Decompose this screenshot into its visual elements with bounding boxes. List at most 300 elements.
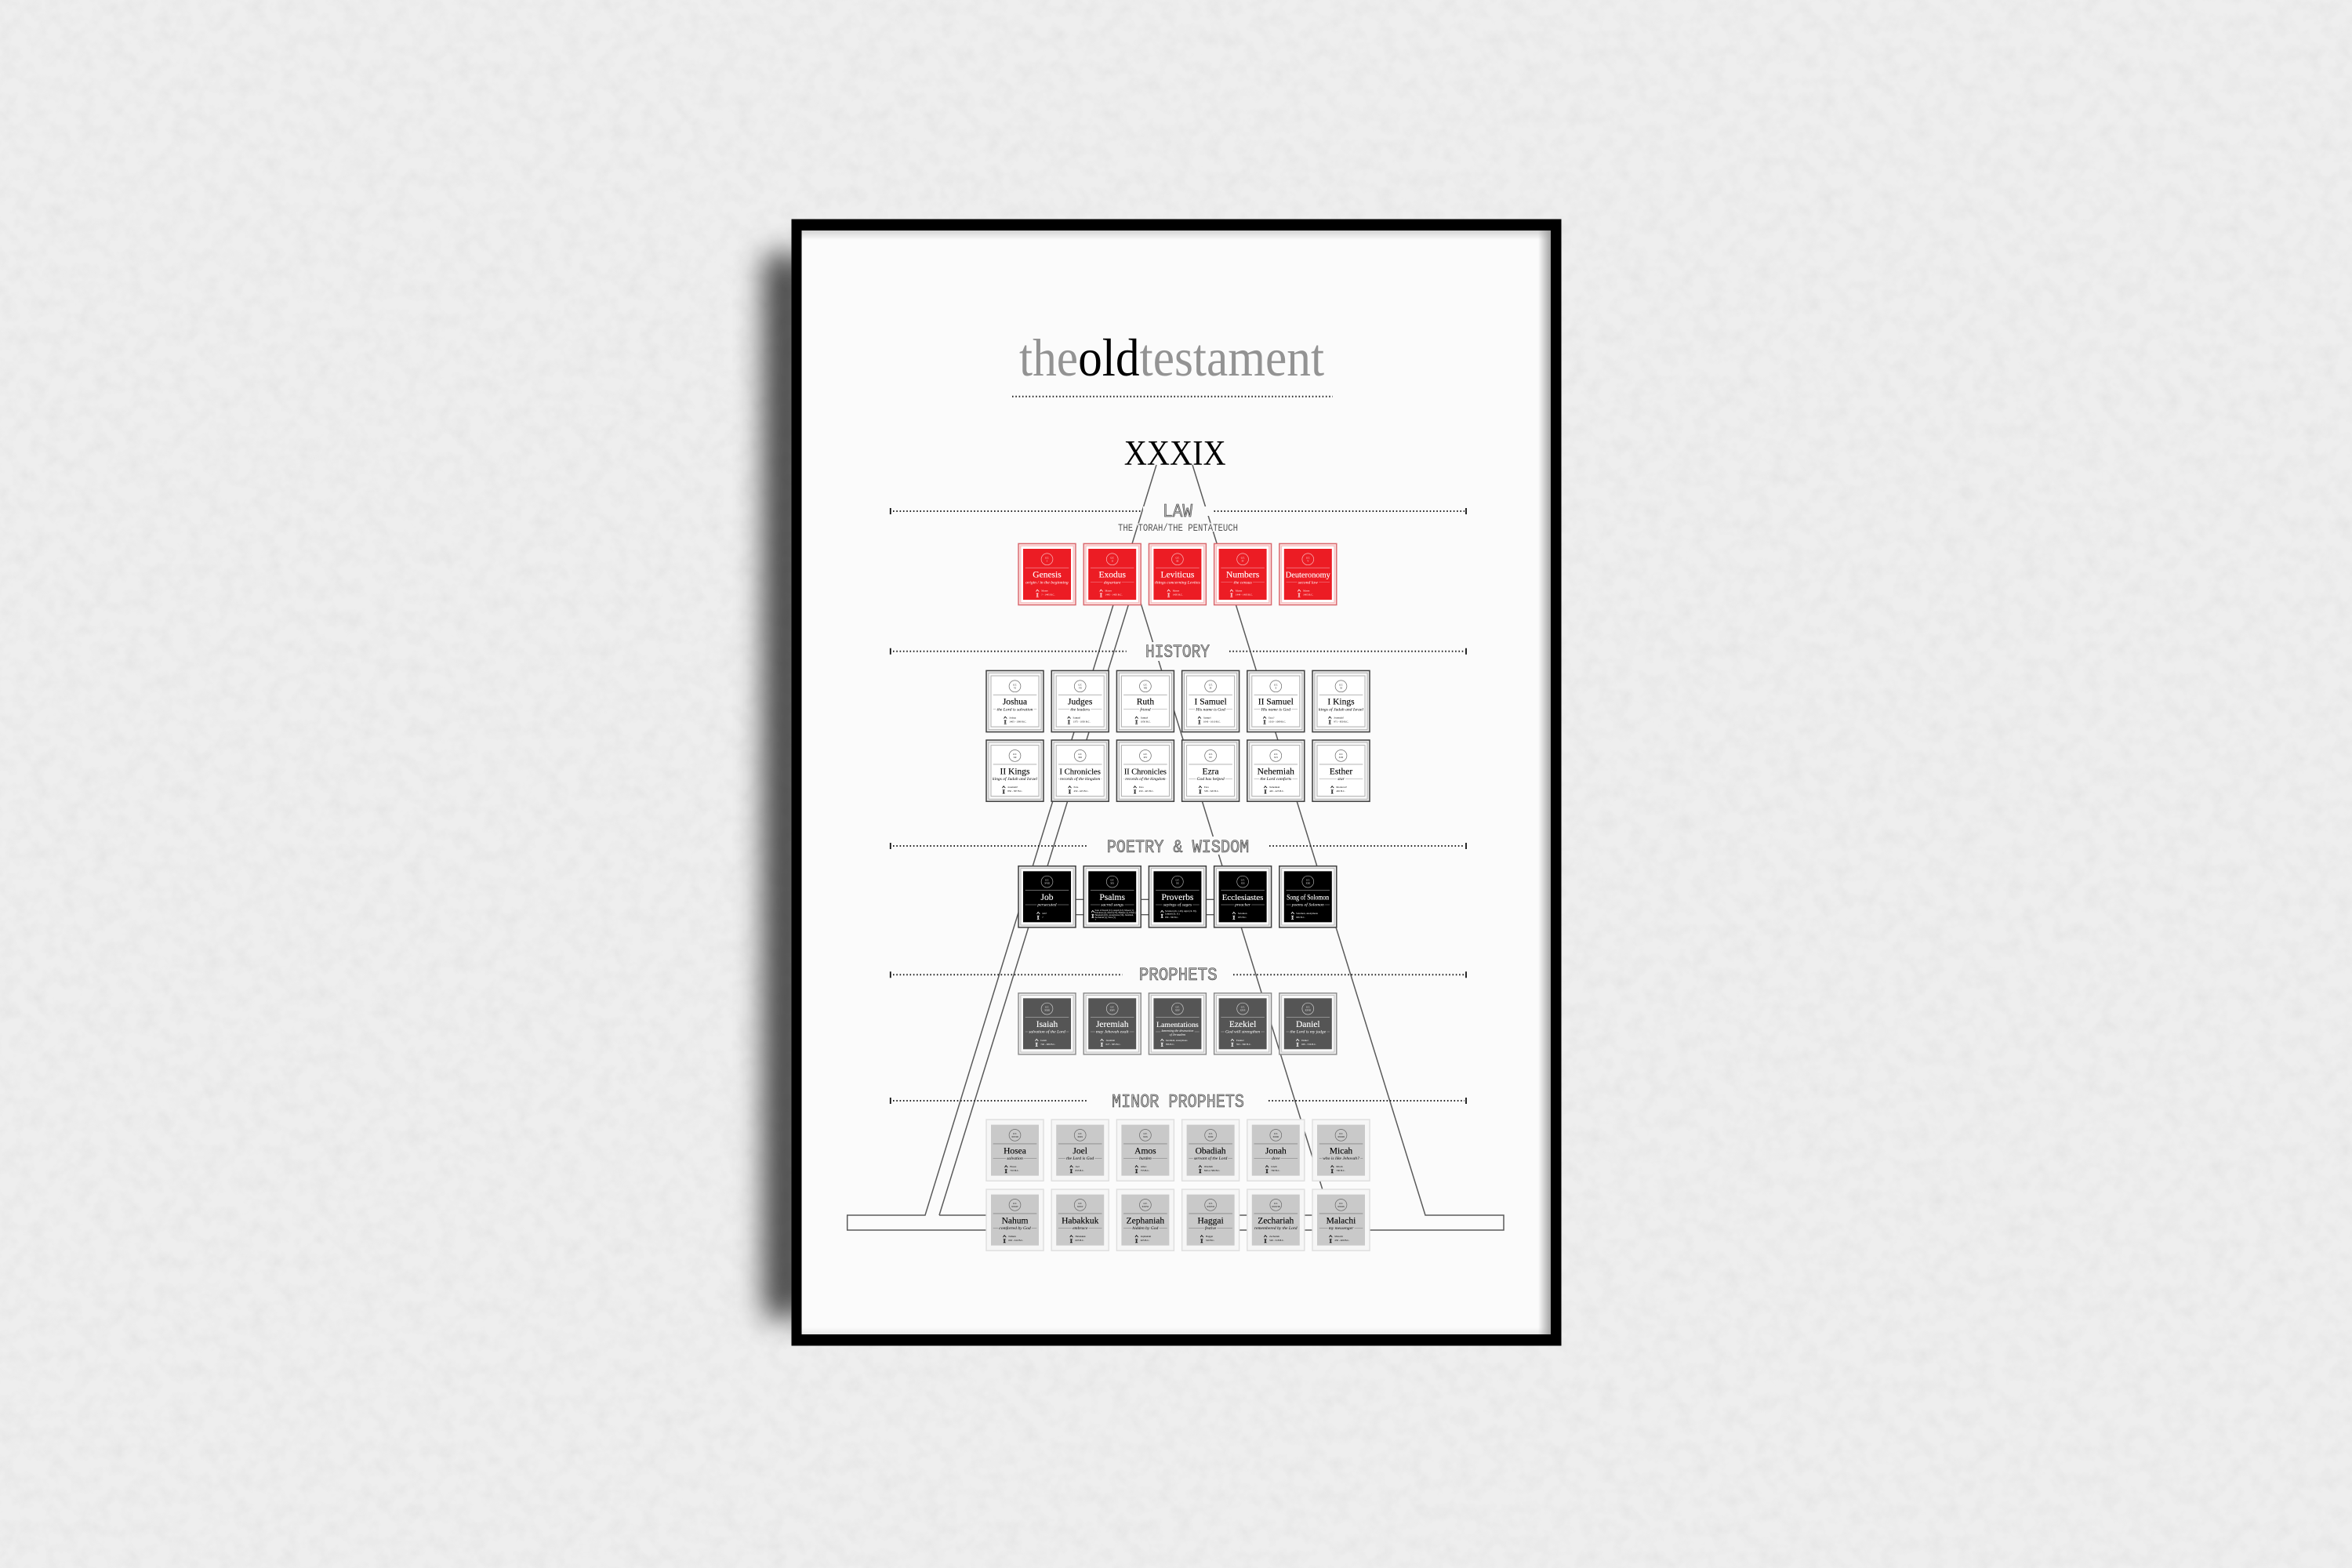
card: Judges: O.T.: [1078, 684, 1082, 686]
cards: poetry: [1018, 866, 1337, 927]
card: Haggai: 520 B.C.: [1206, 1239, 1215, 1242]
card: Ruth: O.T.: [1144, 684, 1148, 686]
card: Zephaniah: [1116, 1189, 1174, 1250]
card: Zephaniah: O.T.: [1144, 1203, 1148, 1205]
card: I Chronicles: 450 - 425 B.C.: [1074, 789, 1089, 793]
card: Lamentations: lamenting the destruction: [1161, 1029, 1193, 1033]
cards: law: [1018, 543, 1337, 605]
card: II Kings: kings of Judah and Israel: [993, 776, 1037, 782]
card: Psalms: Sons of Korah (11), Asaph (12), Moses (1),: [1094, 909, 1134, 912]
card: Micah: 700 B.C.: [1336, 1169, 1345, 1172]
card: II Samuel: His name is God: [1261, 707, 1290, 712]
card: Psalms: Hezekiah (10), anonymous (50), Jeremiah,: [1094, 913, 1134, 916]
card: Deuteronomy: V: [1307, 560, 1308, 562]
card: Numbers: the census: [1234, 580, 1252, 585]
card: Haggai: [1182, 1189, 1240, 1250]
card: Jeremiah: may Jehovah exalt: [1096, 1030, 1129, 1035]
heading: prophets: PROPHETS: [1139, 965, 1218, 985]
card: Deuteronomy: Deuteronomy: [1286, 572, 1331, 580]
card: Ruth: Samuel: [1141, 717, 1148, 720]
panel: law: [891, 502, 1466, 605]
card: Ecclesiastes: O.T.: [1241, 880, 1245, 882]
card: Zephaniah: Zephaniah: [1141, 1235, 1152, 1238]
card: I Chronicles: XIII: [1078, 757, 1082, 759]
card: Daniel: [1279, 993, 1337, 1054]
heading: minor prophets: MINOR PROPHETS: [1112, 1092, 1244, 1113]
card: Esther: [1312, 740, 1370, 801]
section rule: poetry: [893, 845, 1465, 847]
card: Exodus: II: [1112, 560, 1113, 562]
card: Exodus: 1445 - 1405 B.C.: [1105, 593, 1123, 597]
card: Esther: star: [1338, 777, 1345, 782]
card: Leviticus: [1149, 543, 1206, 605]
card: Jeremiah: [1083, 993, 1141, 1054]
card: Jeremiah: Jeremiah: [1096, 1020, 1129, 1029]
card: Psalms: [1083, 866, 1141, 927]
card: Joshua: Joshua: [1003, 698, 1027, 707]
card: Numbers: 1444 - 1405 B.C.: [1236, 593, 1253, 597]
card: I Samuel: His name is God: [1195, 707, 1225, 712]
title rule: [1012, 396, 1333, 397]
card: Exodus: [1083, 543, 1141, 605]
card: Song of Solomon: Song of Solomon: [1287, 893, 1330, 901]
card: Habakkuk: Habakkuk: [1062, 1216, 1099, 1225]
card: Judges: [1051, 670, 1109, 732]
card: Proverbs: Solomon (ch. 1-29), Agur (ch. 30),: [1165, 909, 1196, 913]
card: Psalms: Solomon (2), David (73), Heman (1), Ethan (1),: [1094, 911, 1138, 914]
card: Jonah: XXXII: [1272, 1136, 1279, 1138]
card: I Kings: I Kings: [1327, 698, 1355, 707]
card: Daniel: the Lord is my judge: [1290, 1030, 1327, 1035]
card: Daniel: O.T.: [1306, 1007, 1310, 1009]
card: Deuteronomy: Moses: [1303, 590, 1310, 593]
card: I Chronicles: records of the kingdom: [1060, 776, 1100, 782]
card: Ezekiel: God will strengthen: [1225, 1030, 1260, 1035]
card: II Kings: Jeremiah?: [1007, 786, 1018, 789]
card: Nehemiah: XVI: [1274, 757, 1278, 759]
card: Malachi: O.T.: [1339, 1203, 1343, 1205]
card: Amos: Amos: [1141, 1165, 1147, 1168]
card: Psalms: Psalms: [1099, 893, 1126, 902]
card: Joel: Joel: [1073, 1146, 1087, 1156]
card: Daniel: Daniel: [1296, 1020, 1320, 1029]
card: Daniel: 605 - 536 B.C.: [1301, 1043, 1316, 1046]
card: II Samuel: Ezra?: [1269, 717, 1275, 720]
card: Esther: XVII: [1339, 757, 1343, 759]
card: Amos: XXX: [1143, 1136, 1148, 1138]
card: II Kings: XII: [1014, 757, 1016, 759]
card: Ezra: O.T.: [1209, 753, 1213, 756]
card: Lamentations: Jeremiah, anonymous: [1166, 1039, 1188, 1043]
card: Habakkuk: [1051, 1189, 1109, 1250]
card: Nehemiah: Nehemiah: [1269, 786, 1280, 789]
card: Deuteronomy: second law: [1298, 580, 1318, 585]
card: I Chronicles: [1051, 740, 1109, 801]
card: Job: [1018, 866, 1076, 927]
card: Ezra: XV: [1209, 757, 1212, 759]
card: Lamentations: Lamentations: [1156, 1021, 1199, 1029]
card: Habakkuk: embrace: [1073, 1226, 1088, 1231]
card: Joel: [1051, 1120, 1109, 1181]
card: Proverbs: Proverbs: [1161, 893, 1194, 902]
card: Psalms: sacred songs: [1101, 903, 1123, 908]
card: Lamentations: O.T.: [1176, 1007, 1180, 1009]
card: Lamentations: XXV: [1175, 1010, 1180, 1012]
card: Jeremiah: O.T.: [1110, 1007, 1114, 1009]
card: Obadiah: Obadiah: [1196, 1146, 1226, 1156]
card: Nahum: O.T.: [1013, 1203, 1017, 1205]
card: Joel: XXIX: [1077, 1136, 1083, 1138]
card: I Samuel: [1182, 670, 1240, 732]
card: Proverbs: 950 - 700 B.C.: [1165, 916, 1178, 919]
card: II Kings: O.T.: [1013, 753, 1017, 756]
card: Zechariah: remembered by the Lord: [1254, 1226, 1298, 1231]
card: Amos: [1116, 1120, 1174, 1181]
card: Ruth: 1050 B.C.: [1141, 720, 1151, 724]
card: Ezra: Ezra: [1204, 786, 1209, 789]
card: II Chronicles: [1116, 740, 1174, 801]
card: Jeremiah: XXIV: [1109, 1010, 1115, 1012]
heading: history: HISTORY: [1145, 642, 1210, 662]
card: Nehemiah: O.T.: [1274, 753, 1278, 756]
card: Lamentations: 586 B.C.: [1166, 1043, 1174, 1046]
card: Exodus: Exodus: [1098, 571, 1126, 580]
card: Genesis: Moses: [1041, 590, 1048, 593]
card: Malachi: Malachi: [1327, 1216, 1356, 1225]
frame shadow: [764, 255, 808, 1317]
card: Joshua: [986, 670, 1044, 732]
card: Psalms: XIX: [1110, 883, 1114, 885]
card: Isaiah: Isaiah: [1036, 1020, 1058, 1029]
card: Zephaniah: 625 B.C.: [1141, 1239, 1149, 1242]
card: Micah: who is like Jehovah?: [1323, 1156, 1359, 1161]
card: Isaiah: O.T.: [1045, 1007, 1049, 1009]
card: Jonah: 760 B.C.: [1271, 1169, 1280, 1172]
card: Esther: O.T.: [1339, 753, 1343, 756]
card: Job: XVIII: [1044, 883, 1050, 885]
card: Obadiah: 840 or 586 B.C.: [1204, 1169, 1221, 1172]
card: II Chronicles: XIV: [1144, 757, 1147, 759]
card: Ecclesiastes: XXI: [1241, 883, 1245, 885]
card: Ecclesiastes: preacher: [1234, 903, 1251, 908]
card: Malachi: 430 - 400 B.C.: [1334, 1239, 1349, 1242]
card: Ruth: [1116, 670, 1174, 732]
poster frame: [792, 220, 1562, 1345]
card: Numbers: Numbers: [1226, 571, 1260, 580]
card: Proverbs: sayings of sages: [1163, 902, 1192, 908]
card: Hosea: Hosea: [1010, 1165, 1017, 1168]
card: Jonah: dove: [1272, 1156, 1280, 1161]
heading: poetry and wisdom: POETRY & WISDOM: [1107, 837, 1249, 858]
card: Numbers: Moses: [1236, 590, 1243, 593]
card: Genesis: [1018, 543, 1076, 605]
card: Hosea: 710 B.C.: [1010, 1169, 1019, 1172]
card: Job: ?: [1042, 916, 1044, 919]
cards: prophets: [1018, 993, 1337, 1054]
card: Habakkuk: 605 B.C.: [1076, 1239, 1084, 1242]
card: Ezekiel: [1214, 993, 1272, 1054]
card: Micah: Micah: [1336, 1165, 1343, 1168]
card: Malachi: Malachi: [1334, 1235, 1343, 1238]
card: Ezekiel: O.T.: [1241, 1007, 1245, 1009]
card: Esther: Esther: [1330, 767, 1352, 776]
card: Genesis: ? - 1445 B.C.: [1041, 593, 1055, 597]
card: Zechariah: 520 - 518 B.C.: [1269, 1239, 1284, 1242]
card: Ezekiel: 593 - 560 B.C.: [1236, 1043, 1251, 1046]
card: Ezekiel: Ezekiel: [1229, 1020, 1256, 1029]
card: Nehemiah: the Lord comforts: [1260, 776, 1291, 782]
card: I Kings: XI: [1340, 687, 1342, 689]
card: Zechariah: [1247, 1189, 1305, 1250]
card: Haggai: XXXVII: [1207, 1206, 1214, 1208]
card: II Chronicles: records of the kingdom: [1125, 776, 1166, 782]
card: Joshua: O.T.: [1013, 684, 1017, 686]
card: I Samuel: Samuel: [1203, 717, 1211, 720]
card: Ezra: God has helped: [1197, 777, 1225, 782]
card: II Kings: II Kings: [1000, 767, 1030, 776]
card: Leviticus: 1405 B.C.: [1173, 593, 1183, 597]
card: Joel: 835 B.C.: [1076, 1169, 1084, 1172]
card: Ecclesiastes: [1214, 866, 1272, 927]
card: Joshua: the Lord is salvation: [997, 707, 1033, 712]
card: Proverbs: O.T.: [1176, 880, 1180, 882]
card: Ezra: Ezra: [1203, 767, 1219, 776]
card: Leviticus: Leviticus: [1161, 571, 1195, 580]
card: Obadiah: Obadiah: [1204, 1165, 1213, 1168]
card: Nahum: Nahum: [1002, 1216, 1028, 1225]
card: Nahum: comforted by God: [999, 1225, 1031, 1231]
card: I Chronicles: Ezra: [1074, 786, 1079, 789]
card: Hosea: [986, 1120, 1044, 1181]
section rule: law: [893, 510, 1465, 512]
card: Lamentations: of Jerusalem: [1170, 1033, 1185, 1036]
card: Jonah: Jonah: [1265, 1146, 1287, 1156]
card: Jonah: [1247, 1120, 1305, 1181]
card: Obadiah: servant of the Lord: [1194, 1156, 1228, 1161]
card: Amos: O.T.: [1144, 1133, 1148, 1135]
card: Zechariah: Zechariah: [1258, 1216, 1294, 1225]
card: Genesis: origin / in the beginning: [1025, 580, 1069, 585]
card: Ezra: 538 - 520 B.C.: [1204, 789, 1219, 793]
card: Nehemiah: 445 - 425 B.C.: [1269, 789, 1284, 793]
card: Hosea: Hosea: [1004, 1146, 1026, 1156]
card: Isaiah: 740 - 680 B.C.: [1040, 1043, 1055, 1046]
card: Exodus: O.T.: [1110, 557, 1114, 559]
card: Genesis: O.T.: [1045, 557, 1049, 559]
card: I Kings: [1312, 670, 1370, 732]
card: Zechariah: XXXVIII: [1272, 1206, 1280, 1208]
card: Ecclesiastes: Solomon: [1238, 912, 1247, 915]
subheading: torah: THE TORAH/THE PENTATEUCH: [1118, 522, 1238, 534]
card: Haggai: O.T.: [1209, 1203, 1213, 1205]
card: I Kings: O.T.: [1339, 684, 1343, 686]
card: Song of Solomon: Solomon, anonymous: [1296, 912, 1319, 916]
total books numeral: XXXIX: [1124, 434, 1226, 473]
card: Judges: the leaders: [1070, 707, 1090, 712]
card: Zechariah: O.T.: [1274, 1203, 1278, 1205]
card: Proverbs: Lemuel (ch. 31): [1165, 912, 1180, 915]
card: I Samuel: I Samuel: [1194, 698, 1227, 707]
card: Joshua: VI: [1014, 687, 1016, 689]
card: Joel: O.T.: [1078, 1133, 1082, 1135]
card: Joshua: 1405 - 1390 B.C.: [1009, 720, 1027, 724]
card: Ezekiel: Ezekiel: [1236, 1039, 1244, 1042]
card: Jeremiah: 627 - 585 B.C.: [1105, 1043, 1121, 1046]
card: Nahum: 663 - 612 B.C.: [1008, 1239, 1023, 1242]
card: II Samuel: O.T.: [1274, 684, 1278, 686]
card: Psalms: Zechariah (1), Ezra (1): [1094, 916, 1116, 919]
card: Zephaniah: hidden by God: [1132, 1226, 1159, 1231]
card: Daniel: XXVII: [1305, 1010, 1311, 1012]
card: Leviticus: III: [1177, 560, 1178, 562]
card: Numbers: O.T.: [1241, 557, 1245, 559]
card: Psalms: O.T.: [1110, 880, 1114, 882]
card: Ruth: friend: [1140, 706, 1151, 712]
cards: history: [986, 670, 1370, 801]
card: Haggai: festive: [1205, 1225, 1217, 1231]
card: II Chronicles: Ezra: [1139, 786, 1144, 789]
card: Obadiah: XXXI: [1208, 1136, 1214, 1138]
card: Habakkuk: Habakkuk: [1076, 1235, 1086, 1238]
connector outline: [848, 465, 1504, 1230]
card: Lamentations: [1149, 993, 1206, 1054]
card: Amos: 755 B.C.: [1141, 1169, 1149, 1172]
card: Zephaniah: XXXVI: [1142, 1206, 1149, 1208]
card: Judges: VII: [1079, 687, 1082, 689]
section rule: history: [893, 651, 1465, 652]
card: II Kings: 850 - 587 B.C.: [1007, 789, 1022, 793]
panel: prophets: [891, 965, 1466, 1054]
card: Amos: burden: [1139, 1156, 1152, 1161]
card: Esther: Mordecai?: [1336, 786, 1348, 789]
card: II Chronicles: 450 - 425 B.C.: [1139, 789, 1154, 793]
card: I Samuel: 1043 - 1010 B.C.: [1203, 720, 1221, 724]
card: Obadiah: [1182, 1120, 1240, 1181]
card: Judges: Samuel: [1073, 717, 1080, 720]
card: Nahum: Nahum: [1008, 1235, 1016, 1238]
card: Hosea: O.T.: [1013, 1133, 1017, 1135]
card: Ruth: VIII: [1144, 687, 1147, 689]
card: Isaiah: XXIII: [1044, 1010, 1050, 1012]
card: Micah: Micah: [1330, 1146, 1352, 1156]
card: Deuteronomy: 1405 B.C.: [1303, 593, 1313, 597]
card: Deuteronomy: O.T.: [1306, 557, 1310, 559]
card: Joshua: Joshua: [1009, 717, 1017, 720]
card: Psalms: ?: [1094, 918, 1096, 921]
card: I Kings: kings of Judah and Israel: [1319, 706, 1363, 712]
card: II Chronicles: II Chronicles: [1124, 768, 1167, 776]
card: I Chronicles: O.T.: [1078, 753, 1082, 756]
card: Nehemiah: Nehemiah: [1258, 767, 1294, 776]
card: Song of Solomon: XXII: [1305, 883, 1310, 885]
card: Zephaniah: Zephaniah: [1127, 1216, 1164, 1225]
card: I Samuel: IX: [1210, 687, 1212, 689]
card: Job: Job?: [1042, 912, 1047, 915]
card: Leviticus: O.T.: [1176, 557, 1180, 559]
card: Habakkuk: XXXV: [1077, 1206, 1083, 1208]
card: Zechariah: Zechariah: [1269, 1235, 1279, 1238]
card: Ruth: Ruth: [1137, 698, 1154, 707]
card: Jeremiah: Jeremiah: [1105, 1039, 1115, 1042]
card: II Kings: [986, 740, 1044, 801]
card: Micah: [1312, 1120, 1370, 1181]
card: Numbers: IV: [1242, 560, 1244, 562]
card: Leviticus: things concerning Levites: [1155, 580, 1200, 585]
card: Haggai: Haggai: [1206, 1235, 1213, 1238]
card: Song of Solomon: O.T.: [1306, 880, 1310, 882]
card: Numbers: [1214, 543, 1272, 605]
card: II Samuel: X: [1275, 687, 1276, 689]
card: Proverbs: [1149, 866, 1206, 927]
panel: poetry and wisdom: [891, 837, 1466, 927]
card: Hosea: salvation: [1007, 1156, 1023, 1161]
card: Leviticus: Moses: [1173, 590, 1180, 593]
card: Micah: O.T.: [1339, 1133, 1343, 1135]
panel: history: [891, 642, 1466, 801]
section rule: minor prophets: [893, 1100, 1465, 1102]
card: Job: O.T.: [1045, 880, 1049, 882]
card: Nehemiah: [1247, 740, 1305, 801]
card: Amos: Amos: [1134, 1146, 1156, 1156]
card: Judges: 1375 - 1050 B.C.: [1073, 720, 1091, 724]
card: Isaiah: [1018, 993, 1076, 1054]
card: II Chronicles: O.T.: [1144, 753, 1148, 756]
heading: law: LAW: [1163, 502, 1193, 523]
card: II Samuel: [1247, 670, 1305, 732]
card: Isaiah: Isaiah: [1040, 1039, 1047, 1042]
card: II Samuel: II Samuel: [1258, 698, 1294, 707]
card: I Chronicles: I Chronicles: [1059, 767, 1101, 776]
card: Hosea: XXVIII: [1011, 1136, 1018, 1138]
card: Obadiah: O.T.: [1209, 1133, 1213, 1135]
card: Deuteronomy: [1279, 543, 1337, 605]
section rule: prophets: [893, 974, 1465, 975]
panel: minor prophets: [891, 1092, 1466, 1250]
card: Nahum: XXXIV: [1011, 1206, 1018, 1208]
cards: minor prophets: [986, 1120, 1370, 1250]
card: Malachi: XXXIX: [1338, 1206, 1345, 1208]
card: Nahum: [986, 1189, 1044, 1250]
card: Joel: Joel: [1076, 1165, 1080, 1168]
card: Jonah: Jonah: [1271, 1165, 1277, 1168]
card: Daniel: Daniel: [1301, 1039, 1308, 1042]
card: Song of Solomon: [1279, 866, 1337, 927]
card: Job: persecuted: [1036, 903, 1057, 908]
card: Exodus: departure: [1104, 580, 1121, 585]
card: Malachi: [1312, 1189, 1370, 1250]
card: Judges: Judges: [1068, 698, 1093, 707]
card: Joel: the Lord is God: [1066, 1156, 1094, 1161]
card: Genesis: Genesis: [1033, 571, 1062, 580]
card: Proverbs: XX: [1176, 883, 1179, 885]
card: Malachi: my messenger: [1329, 1226, 1354, 1231]
card: Esther: 465 B.C.: [1336, 789, 1345, 793]
card: Ezra: [1182, 740, 1240, 801]
card: Exodus: Moses: [1105, 590, 1112, 593]
card: I Samuel: O.T.: [1209, 684, 1213, 686]
card: Ecclesiastes: Ecclesiastes: [1222, 893, 1263, 902]
card: Habakkuk: O.T.: [1078, 1203, 1082, 1205]
card: I Kings: 971 - 850 B.C.: [1334, 720, 1348, 724]
card: I Kings: Jeremiah?: [1334, 717, 1345, 720]
title: theoldtestament: [1019, 328, 1324, 388]
card: II Samuel: 1010 - 1009 B.C.: [1269, 720, 1286, 724]
card: Job: Job: [1041, 893, 1054, 902]
card: Jonah: O.T.: [1274, 1133, 1278, 1135]
card: Haggai: Haggai: [1197, 1216, 1224, 1225]
card: Ezekiel: XXVI: [1240, 1010, 1246, 1012]
card: Isaiah: salvation of the Lord: [1029, 1029, 1065, 1035]
